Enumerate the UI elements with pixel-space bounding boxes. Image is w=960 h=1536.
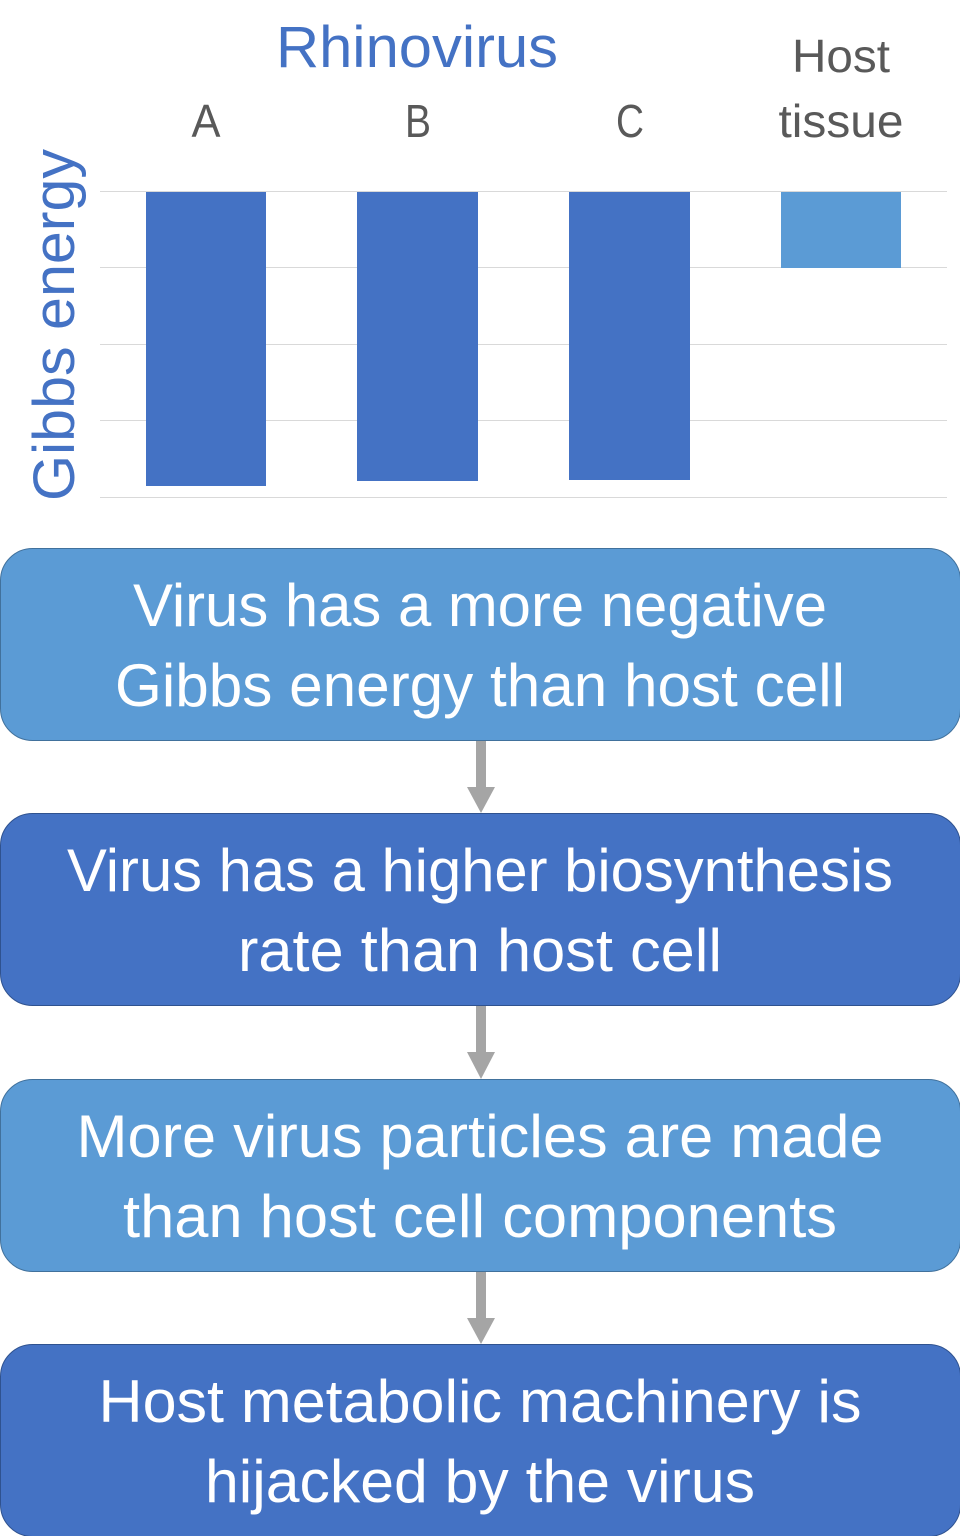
column label C: C	[616, 95, 644, 147]
bar C	[569, 192, 690, 480]
column label A: A	[192, 95, 221, 147]
panel: more virus particles: than host cell components	[123, 1183, 837, 1250]
panel: host machinery hijacked	[0, 1344, 960, 1536]
arrow 3	[467, 1272, 495, 1344]
column label Host tissue: tissue	[778, 95, 904, 147]
arrow 1	[467, 741, 495, 813]
panel: higher biosynthesis rate: rate than host cell	[238, 917, 722, 984]
panel: more negative Gibbs energy	[0, 548, 960, 740]
panel: more negative Gibbs energy: Gibbs energy than host cell	[115, 652, 845, 719]
panel: host machinery hijacked: hijacked by the virus	[205, 1448, 755, 1515]
panel: more negative Gibbs energy: Virus has a more negative	[133, 572, 827, 639]
chart title: Rhinovirus: Rhinovirus	[276, 15, 558, 80]
column label Host tissue	[778, 30, 904, 147]
panel: higher biosynthesis rate: Virus has a higher biosynthesis	[67, 837, 893, 904]
arrow 2	[467, 1006, 495, 1079]
panel: more virus particles	[0, 1080, 960, 1272]
bar A	[146, 192, 266, 486]
bar B	[357, 192, 478, 481]
panel: higher biosynthesis rate	[0, 814, 960, 1006]
panel: host machinery hijacked: Host metabolic machinery is	[98, 1368, 862, 1435]
column label B: B	[405, 95, 431, 147]
bar host tissue	[781, 192, 901, 268]
panel: more virus particles: More virus particles are made	[76, 1103, 883, 1170]
y axis label: Gibbs energy	[22, 149, 87, 501]
column label Host tissue: Host	[792, 30, 890, 82]
bar chart	[22, 15, 947, 501]
